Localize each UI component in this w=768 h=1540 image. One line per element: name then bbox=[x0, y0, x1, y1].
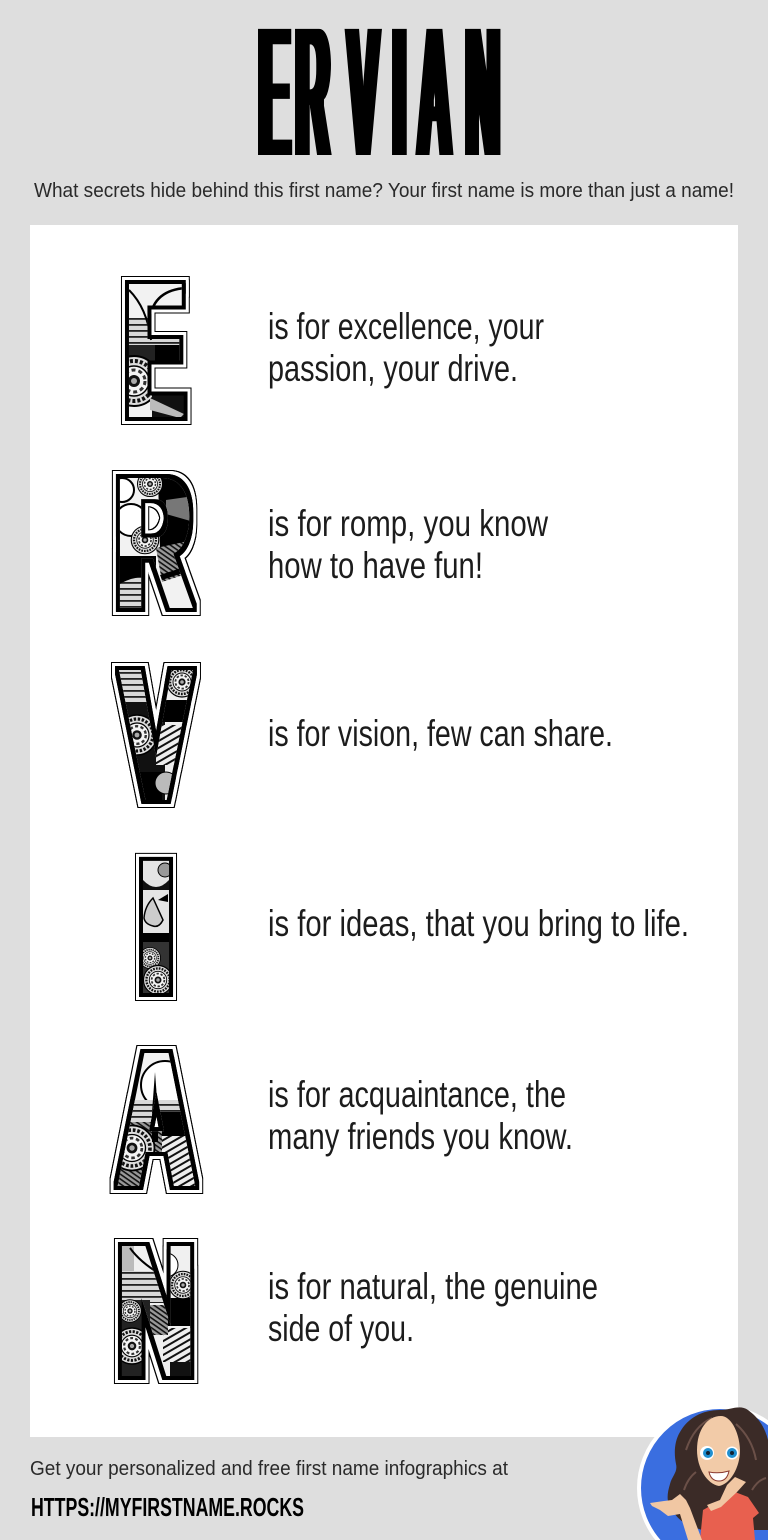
icon: decorative letter V bbox=[111, 662, 201, 808]
text: E line: passion, your drive. bbox=[268, 348, 518, 389]
text: R line bbox=[268, 503, 548, 586]
icon: decorative letter I: I bbox=[137, 819, 175, 1034]
text: A line: is for acquaintance, the bbox=[268, 1074, 566, 1115]
text: A line: many friends you know. bbox=[268, 1116, 573, 1157]
row: letter I bbox=[137, 819, 689, 1034]
icon: decorative letter E: E bbox=[126, 241, 184, 458]
footer url: HTTPS://MYFIRSTNAME.ROCKS bbox=[31, 1492, 304, 1522]
subtitle: What secrets hide behind this first name? Your first name is more than just a name! bbox=[34, 180, 734, 202]
icon: decorative letter V: V bbox=[121, 630, 191, 841]
icon: avatar of woman bbox=[639, 1407, 768, 1540]
row: letter E bbox=[109, 241, 544, 458]
text: R line: is for romp, you know bbox=[268, 503, 548, 544]
icon: decorative letter N bbox=[114, 1238, 198, 1384]
icon: decorative letter N: N bbox=[118, 1206, 194, 1417]
icon: decorative letter I bbox=[135, 852, 178, 1001]
row: letter N bbox=[114, 1206, 598, 1417]
row: letter R bbox=[110, 438, 548, 649]
text: E line bbox=[268, 306, 544, 389]
text: N line bbox=[268, 1266, 598, 1349]
icon: decorative letter A bbox=[110, 1045, 204, 1194]
text: V line: is for vision, few can share. bbox=[268, 713, 613, 754]
text: N line: side of you. bbox=[268, 1308, 414, 1349]
icon: decorative letter R: R bbox=[116, 438, 192, 649]
text: N line: is for natural, the genuine bbox=[268, 1266, 598, 1307]
text: E line: is for excellence, your bbox=[268, 306, 544, 347]
footer call to action: Get your personalized and free first name infographics at bbox=[30, 1458, 508, 1480]
row: letter V bbox=[115, 630, 613, 841]
text: R line: how to have fun! bbox=[268, 545, 483, 586]
panel: white letter panel bbox=[30, 225, 738, 1437]
icon: decorative letter E bbox=[120, 276, 192, 425]
icon: decorative letter A: A bbox=[118, 1013, 195, 1228]
icon: decorative letter R bbox=[112, 470, 201, 616]
row: letter A bbox=[110, 1013, 573, 1228]
text: A line bbox=[268, 1074, 573, 1157]
